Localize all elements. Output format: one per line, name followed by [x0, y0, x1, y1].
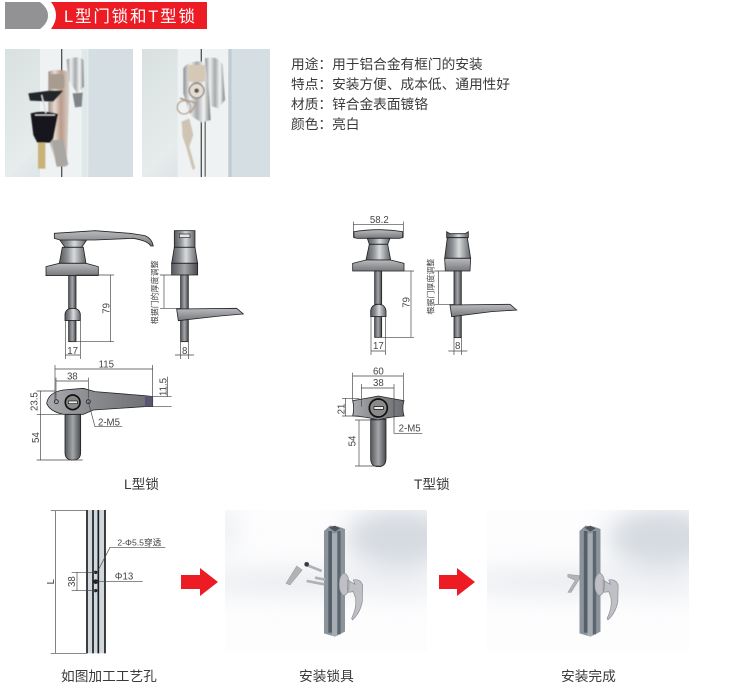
spec text: 用途：用于铝合金有框门的安装: [291, 56, 483, 72]
dimension 79 and 17: 79: [101, 303, 112, 314]
drilling dimensions: 2-Φ5.5穿透: [117, 536, 162, 547]
drilling dimensions: 38: [67, 576, 78, 587]
handle assembly: [595, 573, 618, 620]
key cylinder: [369, 399, 387, 417]
L lock side elevation drawing: [46, 231, 243, 359]
T handle: [353, 396, 404, 420]
plan dimensions: 2-M5: [98, 418, 120, 429]
caption: machining holes: 如图加工工艺孔: [61, 669, 157, 684]
side view: [445, 232, 517, 338]
holes: [93, 571, 98, 592]
drilling dimensions: Φ13: [115, 571, 133, 582]
L lock plan view drawing: [29, 360, 172, 460]
side dimensions: 8: [182, 346, 187, 357]
caption: install lock: 安装锁具: [299, 669, 354, 684]
plan dimensions: 54: [348, 435, 359, 446]
install image: exploded view: [225, 510, 427, 637]
side dimensions: 8: [455, 341, 460, 352]
title: L型门锁和T型锁: [64, 7, 195, 26]
spec text: [291, 56, 510, 132]
banner red title bar: [51, 2, 207, 29]
key cylinder: [65, 395, 80, 410]
front dimensions: 17: [373, 341, 384, 352]
dimension 79 and 17: 17: [67, 346, 78, 357]
handle tip: [145, 396, 153, 407]
front view: [353, 230, 404, 337]
front dimensions: [353, 215, 414, 355]
plan dimensions: [29, 360, 172, 460]
aluminium extrusion: [324, 526, 345, 637]
caption: install complete: 安装完成: [561, 669, 616, 684]
plan dimensions: 38: [67, 372, 78, 383]
front dimensions: 58.2: [370, 215, 389, 226]
arrow 1: [181, 568, 218, 596]
front view: [46, 231, 153, 342]
plan dimensions: 2-M5: [399, 424, 421, 435]
side dimensions: [426, 259, 467, 355]
handle assembly: [339, 573, 363, 620]
arrow 2: [439, 568, 475, 596]
banner grey tab: [5, 2, 48, 29]
handle outline: [47, 388, 153, 414]
photo: T lock with keys: [142, 49, 270, 177]
front dimensions: 79: [401, 297, 412, 308]
dimension 79 and 17: [65, 275, 114, 359]
profile drilling drawing: [46, 510, 165, 653]
plan dimensions: 60: [373, 366, 384, 377]
plan dimensions: 38: [373, 378, 384, 389]
spec text: 材质：锌合金表面镀铬: [291, 96, 428, 112]
L lock caption: L型锁: [124, 477, 159, 492]
T lock caption: T型锁: [414, 477, 450, 492]
drilling dimensions: [46, 511, 165, 653]
side dimensions: 根据门厚度调整: [426, 259, 436, 315]
shaft: [371, 419, 386, 467]
T lock plan view drawing: [336, 366, 422, 467]
screw holes: [54, 400, 90, 404]
side dimensions: [149, 260, 194, 359]
T lock side elevation drawing: [353, 215, 517, 355]
plan dimensions: 23.5: [29, 392, 40, 411]
header banner: [5, 2, 207, 29]
spec text: 特点：安装方便、成本低、通用性好: [291, 77, 510, 92]
plan dimensions: [336, 366, 422, 466]
drilling dimensions: L: [46, 578, 57, 584]
rear cover: [568, 574, 579, 592]
side view: [172, 231, 243, 342]
plan dimensions: 11.5: [159, 378, 170, 396]
plan dimensions: 115: [99, 360, 114, 371]
plan dimensions: 21: [336, 404, 347, 414]
side dimensions: 根据门的厚度调整: [149, 260, 159, 324]
plan dimensions: 54: [31, 432, 42, 443]
spec text: 颜色：亮白: [291, 116, 359, 132]
exploded screws and cover: [286, 562, 325, 585]
shaft: [65, 414, 81, 460]
aluminium extrusion: [579, 526, 600, 637]
photo: L lock with keys: [5, 49, 133, 177]
aluminium profile: [87, 510, 105, 653]
install image: assembled view: [487, 510, 689, 637]
